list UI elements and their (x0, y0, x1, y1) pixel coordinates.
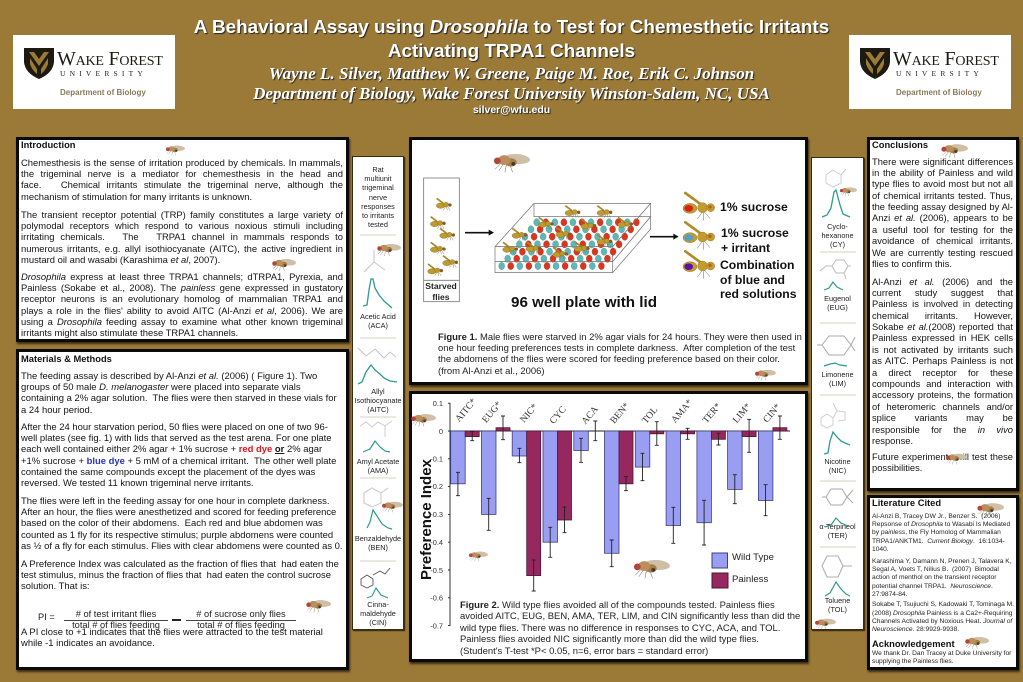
panel: left compound sidebar (352, 156, 404, 630)
bars: AITC (451, 431, 479, 496)
panel: conclusions (867, 137, 1019, 491)
y axis tick labels: -0.5 (430, 566, 443, 575)
molecule: TOL (822, 556, 852, 577)
text: acknowledgement: We thank Dr. Dan Tracey at Duke University for (872, 650, 1011, 657)
title: Wayne L. Silver, Matthew W. Greene, Paige M. Roe, Erik C. Johnson (269, 64, 754, 83)
text: methods paragraph 2: reversed. We tested 11 known trigeminal nerve irritants. (21, 478, 254, 489)
chart: preference index bars (430, 396, 790, 630)
text: conclusions paragraph 1: of chemical irritants tested. Thus, (872, 191, 1013, 201)
bars: CYC (543, 431, 572, 557)
text: acknowledgement (872, 650, 1012, 665)
compound labels (453, 396, 783, 427)
icon: fly figure 2 large (634, 559, 670, 578)
caption: figure 2: avoided AITC, EUG, BEN, AMA, TER, LIM, and CIN significantly less than did the (460, 611, 800, 622)
trace: BEN (367, 510, 392, 529)
text: acknowledgement: supplying the Painless flies. (872, 658, 954, 665)
figure 1 diagram (424, 178, 715, 302)
bars: EUG (482, 416, 510, 530)
panel: figure 2 (409, 391, 808, 662)
label: EUG (824, 294, 851, 312)
label: NIC: (NIC) (829, 466, 846, 475)
label: TOL: (TOL) (828, 605, 847, 614)
text: methods paragraph 1: a 24 hour period. (21, 405, 92, 416)
text: conclusions paragraph 1: the feeding assay designed by Al- (872, 202, 1013, 212)
text: introduction paragraph 1: mechanism of stimulation for many irritants is unknown. (21, 191, 252, 202)
text: introduction paragraph 3: Drosophila express at least three TRPA1 channels; dTRPA1, Pyrexia, and (21, 270, 343, 282)
compound labels: EUG* (480, 399, 504, 425)
label: TOL: Toluene (825, 596, 850, 605)
text: methods paragraph 2: each well contained either 2% agar + 1% sucrose + red dye or 2% agar (21, 444, 322, 455)
caption: figure 1: Figure 1. Male flies were starved in 2% agar vials for 24 hours. They were then used in (438, 332, 802, 342)
compound labels: CIN* (761, 402, 783, 425)
vial flies (428, 198, 458, 276)
text: conclusions paragraph 2: current study suggest that (872, 288, 1013, 298)
vial (424, 178, 459, 302)
label: AITC (354, 387, 402, 414)
compound labels: TOL (640, 405, 660, 426)
bars: CIN (758, 416, 787, 516)
text: introduction paragraph 3: Painless (Sokabe et al., 2008). The painless gene expressed in gustatory (21, 282, 343, 293)
label: CIN: (CIN) (369, 618, 387, 627)
y axis tick labels (430, 399, 443, 630)
text: conclusions paragraph 2: splice variants may be (872, 413, 1013, 423)
molecule: AITC (358, 348, 396, 358)
label: ACA (360, 312, 396, 330)
y axis tick labels: -0.6 (430, 594, 443, 602)
text: preference index note: while -1 indicates an avoidance. (21, 638, 155, 649)
bars: ACA (574, 421, 597, 462)
bars: NIC (512, 431, 541, 591)
caption: figure 1 (438, 332, 802, 377)
panel: materials and methods (16, 349, 349, 670)
compound labels: CYC (548, 404, 569, 426)
label: EUG: Eugenol (824, 294, 851, 303)
text: methods paragraph 3: as ½ of a fly for each stimulus. Flies with clear abdomens were counted as 0. (21, 541, 343, 552)
text: methods paragraph 3: After an hour, the flies were anesthetized and scored for feeding preference (21, 507, 336, 518)
compound labels: AITC* (453, 396, 479, 424)
text: introduction paragraph 2 (21, 208, 343, 265)
text: introduction paragraph 1: the trigeminal nerve is a mediator for chemesthesis in the head and (21, 168, 343, 179)
department line: Department of Biology (896, 88, 982, 96)
icon: fly figure 1 top (494, 153, 530, 172)
label: combination (720, 258, 797, 301)
references: potential channel TRPA1. Neuroscience. (872, 582, 993, 590)
icon: fly figure 2 mid (469, 551, 488, 561)
label: CY: Cyclo- (827, 222, 848, 231)
sidebar text: rat multiunit: to irritants (362, 211, 394, 220)
label: NIC (824, 457, 851, 475)
molecule: TER (822, 489, 853, 505)
text: conclusions paragraph 2: Painless is involved in detecting (872, 299, 1013, 309)
molecule: EUG (820, 260, 851, 279)
bars: TER (697, 431, 725, 545)
y axis tick labels: -0.1 (430, 454, 443, 464)
wordmark: Wake Forest (893, 48, 999, 70)
icon: shield (24, 48, 54, 79)
icon: fly sidebar left 1 (377, 243, 401, 256)
references: by painless, the Fly Homolog of Mammalian (872, 529, 1001, 536)
wordmark: Wake Forest (57, 48, 163, 70)
sidebar text: rat multiunit: responses (361, 202, 395, 211)
molecule: BEN (364, 488, 388, 507)
well plate (495, 203, 651, 273)
y axis tick labels: -0.7 (430, 622, 443, 630)
text: conclusions paragraph 1: flies to confirm this. (872, 259, 952, 269)
y axis tick labels: -0.4 (430, 538, 443, 547)
text: conclusions paragraph 2: Sokabe et al.(2008) reported that (872, 322, 1013, 332)
text: conclusions paragraph 1: a useful tool for testing for the (872, 225, 1013, 235)
text: methods paragraph 3 (21, 496, 343, 552)
molecule: CIN (361, 568, 390, 588)
references: 27:9874-84. (872, 591, 907, 598)
text: introduction paragraph 1 (21, 156, 343, 202)
caption: figure 2: Painless flies avoided NIC significantly more than did the wild type flies. (460, 634, 759, 645)
text: methods paragraph 3: based on the color of their abdomens. Each red and blue abdomen was (21, 518, 323, 529)
scored fly: blue abdomen (683, 222, 715, 250)
y axis tick labels: -0.3 (430, 510, 443, 519)
icon: fly conclusions top (941, 144, 968, 158)
arrow: plate to scored flies (650, 234, 679, 240)
references (872, 513, 1014, 633)
text: methods paragraph 1: containing a 2% agar solution. The flies were then starved in these vials for (21, 393, 337, 404)
text: methods paragraph 2: After the 24 hour starvation period, 50 flies were placed on one of two 96- (21, 422, 328, 432)
label: LIM: Limonene (821, 370, 854, 379)
text: conclusions paragraph 3: possibilities. (872, 463, 922, 473)
label: CIN (360, 600, 396, 627)
text: conclusions paragraph 2: accessory proteins, the formation (872, 390, 1013, 400)
caption: figure 1: the abdomens of the flies were scored for feeding preference based on their color. (438, 354, 780, 365)
references: TRPA1/ANKTM1. Current Biology. 16:1034- (872, 538, 1005, 545)
label: BEN (355, 534, 401, 552)
label: 1% sucrose + irritant (721, 226, 789, 255)
molecule: NIC (821, 403, 845, 428)
label: CY: hexanone (821, 231, 854, 240)
icon: fly sidebar left 2 (382, 501, 403, 512)
text: introduction paragraph 2: polymodal receptors which respond to various noxious stimuli including (21, 220, 343, 231)
text: introduction paragraph 3: using a Drosophila feeding assay to examine what other known trigeminal (21, 316, 343, 327)
text: conclusions paragraph 1: in the ability of Painless and wild (872, 168, 1013, 178)
label: BEN: (BEN) (368, 543, 388, 552)
icon: fly figure 2 left (411, 413, 436, 427)
trace: CIN (367, 588, 388, 598)
text: introduction paragraph 2: mustard oil and wasabi (Karashima et al, 2007). (21, 254, 220, 265)
title: A Behavioral Assay using Drosophila to Test for Chemesthetic Irritants (194, 17, 829, 38)
icon: fly sidebar right 2 (815, 618, 836, 629)
text: methods paragraph 2 (21, 422, 336, 489)
logo: Wake Forest right (849, 35, 1011, 109)
label: AITC: Isothiocyanate (354, 396, 402, 405)
text: conclusions paragraph 2: chemical irritants. However, (872, 311, 1013, 321)
text: conclusions paragraph 1: type flies to avoid most but not all (872, 179, 1013, 189)
references: Channels Activated by Noxious Heat. Journal of (872, 618, 1012, 625)
icon: fly literature (977, 503, 1004, 517)
icon: fly sidebar right 1 (840, 187, 857, 196)
text: conclusions paragraph 1: Anzi et al. (2006), appears to be (872, 213, 1013, 223)
icon: shield (860, 48, 890, 79)
text: introduction paragraph 3: receptor neurons is an evolutionary homolog of mammalian TRPA1 and (21, 293, 343, 304)
molecule: AMA (360, 421, 392, 437)
panel: literature cited (867, 495, 1019, 670)
panel: introduction (16, 137, 349, 342)
references: Neuroscience. 28:9929-9938. (872, 626, 959, 633)
icon: fly methods (306, 599, 331, 613)
sidebar text: rat multiunit: Rat (372, 165, 384, 174)
label: AMA: (AMA) (368, 466, 388, 475)
references: Sokabe T, Tsujiuchi S, Kadowaki T, Tominaga M. (872, 601, 1014, 608)
label: starved flies: Starved (425, 281, 457, 291)
text: methods paragraph 1: The feeding assay is described by Al-Anzi et al. (2006) ( Figure 1). Two (21, 370, 317, 382)
label: AMA: Amyl Acetate (357, 457, 399, 466)
formula: preference index: total # of flies feeding (72, 620, 160, 630)
text: conclusions paragraph 2: is not activated by irritants such (872, 345, 1013, 355)
label: LIM (821, 370, 854, 388)
label: CY (821, 222, 854, 249)
title: silver@wfu.edu (473, 104, 550, 116)
text: conclusions paragraph 1: We are currently testing rescued (872, 248, 1013, 258)
heading: acknowledgement: Acknowledgement (872, 639, 955, 649)
bars: AMA (666, 428, 695, 543)
bars: BEN (604, 431, 633, 567)
text: preference index definition (21, 558, 339, 592)
text: conclusions paragraph 3: Future experiments will test these (872, 452, 1013, 462)
trace: TER (825, 518, 848, 527)
text: methods paragraph 3: counted as 1 fly for its respective stimulus; purple abdomens were counted (21, 530, 333, 541)
label: TER: (TER) (828, 531, 847, 540)
department line: Department of Biology (60, 88, 146, 96)
text: preference index definition: A Preference Index was calculated as the fraction of flies that had eaten the (21, 558, 339, 570)
references: Karashima Y, Damann N, Prenen J, Talavera K, (872, 558, 1012, 565)
molecule: CY (826, 169, 846, 187)
text: introduction paragraph 1: Chemesthesis is the sense of irritation produced by chemicals. In mammals, (21, 156, 343, 168)
y axis (448, 403, 790, 626)
university line: UNIVERSITY (896, 68, 983, 78)
text: conclusions paragraph 1 (872, 156, 1013, 269)
heading: conclusions: Conclusions (872, 140, 928, 150)
legend swatches (712, 553, 728, 588)
label: EUG: (EUG) (827, 303, 848, 312)
text: introduction paragraph 2: irritating chemicals. The TRPA1 channel in mammals responds to (21, 231, 343, 242)
label: starved flies: flies (432, 292, 450, 302)
icon: fly conclusions bottom (946, 453, 967, 464)
title: Department of Biology, Wake Forest University Winston-Salem, NC, USA (253, 84, 770, 103)
text: preference index note (21, 626, 323, 649)
label: ACA: (ACA) (368, 321, 388, 330)
references: 1040. (872, 546, 889, 553)
references: Segal A, Voets T, Nilius B. (2007) Bimodal (872, 566, 999, 573)
label: 1% sucrose + irritant: + irritant (721, 241, 770, 255)
axis title: preference index: Preference Index (418, 459, 435, 580)
caption: figure 2: (Student's T-test *P< 0.05, n=6, error bars = standard error) (460, 646, 708, 657)
label: TER: α-Terpineol (819, 522, 856, 531)
molecule: ACA (364, 250, 385, 272)
scored fly: purple abdomen (683, 251, 715, 279)
title: Activating TRPA1 Channels (388, 41, 635, 62)
text: preference index definition: solution. That is: (21, 581, 90, 592)
compound labels: NIC* (518, 402, 540, 425)
title (194, 17, 830, 116)
formula: preference index (38, 609, 296, 630)
text: introduction paragraph 1: face. Chemical irritants stimulate the trigeminal nerve, although the (21, 179, 343, 190)
label: combination: of blue and (720, 273, 785, 287)
y axis tick labels: 0.1 (433, 399, 443, 408)
heading: introduction: Introduction (21, 140, 76, 150)
sidebar text: rat multiunit: nerve (369, 193, 387, 202)
text: conclusions paragraph 2: Painless expressed in HEK cells (872, 333, 1013, 343)
trace: NIC (824, 432, 850, 454)
heading: literature cited: Literature Cited (872, 498, 941, 508)
sidebar text: rat multiunit: multiunit (364, 174, 392, 183)
label: BEN: Benzaldehyde (355, 534, 401, 543)
formula: preference index: # of test irritant flies (76, 609, 156, 619)
trace: ACA (363, 279, 392, 308)
sidebar text: rat multiunit (361, 165, 395, 229)
compound labels: ACA (579, 404, 601, 427)
heading: materials and methods: Materials & Methods (21, 354, 112, 364)
scored fly: red abdomen (683, 193, 715, 220)
text: conclusions paragraph 2: compounds and interaction with (872, 379, 1013, 389)
y axis tick labels: 0 (439, 427, 443, 436)
icon: fly figure 1 bottom (755, 369, 776, 380)
panel: right compound sidebar (811, 157, 864, 630)
text: methods paragraph 2: +1% sucrose + blue dye + 5 mM of a chemical irritant. The other well plate (21, 456, 336, 467)
text: introduction paragraph 2: numerous irritants, e.g. allyl isothiocyanate (AITC), the active ingredient in (21, 243, 343, 254)
text: methods paragraph 3: The flies were left in the feeding assay for one hour in complete darkness. (21, 496, 329, 506)
text: conclusions paragraph 2 (872, 276, 1013, 446)
label: 1% sucrose + irritant: 1% sucrose (721, 226, 789, 240)
text: conclusions paragraph 2: response. (872, 436, 913, 446)
text: conclusions paragraph 2: Al-Anzi et al. (2006) and the (872, 276, 1013, 286)
compound labels: TER* (701, 401, 724, 426)
icon: fly acknowledgement (965, 636, 989, 649)
arrow: vial to plate (465, 230, 494, 236)
text: conclusions paragraph 1: avoidance of chemical irritants. (872, 236, 1013, 246)
trace: TOL (825, 582, 850, 596)
molecule: LIM (817, 336, 855, 355)
references: Al-Anzi B, Tracey DW Jr., Benzer S. (2006) (872, 513, 1000, 520)
caption: figure 2 (460, 600, 800, 657)
label: AITC: Allyl (371, 387, 385, 396)
compound labels: AMA* (669, 397, 695, 425)
text: conclusions paragraph 2: responsible for the in vivo (872, 425, 1013, 435)
text: conclusions paragraph 3 (872, 452, 1013, 473)
formula: preference index: PI = (38, 612, 55, 622)
text: introduction paragraph 2: The transient receptor potential (TRP) family constitutes a large variety of (21, 208, 343, 220)
compound labels: LIM* (731, 401, 754, 426)
logo: Wake Forest left (13, 35, 175, 109)
icon: fly intro 2 (272, 258, 296, 271)
sidebar dividers (360, 235, 856, 561)
text: conclusions paragraph 1: There were significant differences (872, 156, 1013, 166)
label: AITC: (AITC) (367, 405, 389, 414)
label: NIC: Nicotine (824, 457, 851, 466)
decorative photo flies (166, 144, 1004, 649)
compound labels: BEN* (608, 401, 632, 426)
text: preference index definition: test stimulus, minus the fraction of flies that had eaten the control sucrose (21, 570, 331, 581)
caption: figure 1: one hour feeding preferences tests in complete darkness. After completion of the test (438, 343, 795, 354)
trace: AITC (358, 365, 397, 384)
caption: figure 1: (from Al-Anzi et al., 2006) (438, 366, 544, 377)
label: 96 well plate: 96 well plate with lid (511, 294, 657, 311)
icon: fly intro 1 (166, 145, 185, 155)
formula: preference index: total # of flies feeding (197, 620, 285, 630)
label: ACA: Acetic Acid (360, 312, 396, 321)
label: CIN: Cinna- (367, 600, 389, 609)
references: action of menthol on the transient receptor (872, 574, 996, 581)
text: conclusions paragraph 2: of heteromeric channels and/or (872, 402, 1013, 412)
label: combination: red solutions (720, 287, 797, 301)
legend: wild type label: Wild Type (732, 552, 774, 563)
trace: EUG (824, 282, 843, 290)
label: combination: Combination (720, 258, 794, 272)
text: conclusions paragraph 2: a direct receptor for these (872, 368, 1013, 378)
university line: UNIVERSITY (60, 68, 147, 78)
label: CIN: maldehyde (360, 609, 396, 618)
text: methods paragraph 2: well plates (see fig. 1) with lids that served as the test arena. For one plate (21, 433, 332, 444)
label: 1% sucrose: 1% sucrose (720, 200, 788, 214)
sidebar text: rat multiunit: trigeminal (362, 183, 394, 192)
text: conclusions paragraph 2: as AITC. Perhaps Painless is not (872, 356, 1013, 366)
sidebar text: rat multiunit: tested (368, 220, 388, 229)
text: introduction paragraph 3 (21, 270, 343, 338)
panel: figure 1 (409, 137, 808, 385)
label: LIM: (LIM) (829, 379, 846, 388)
bars: TOL (635, 422, 664, 481)
text: preference index note: A PI close to +1 indicates that the flies were attracted to the test material (21, 626, 323, 638)
y axis tick labels: -0.2 (430, 482, 443, 491)
label: TOL (824, 596, 850, 614)
legend: painless label: Painless (732, 574, 768, 585)
label: AMA (356, 457, 399, 475)
text: methods paragraph 1: groups of 50 male D. melanogaster were placed into separate vials (21, 382, 301, 393)
text: methods paragraph 2: contained the same compounds except the placement of the dyes was (21, 467, 315, 478)
references: Repsonse of Drosophila to Wasabi Is Mediated (872, 521, 1010, 528)
trace: CY (822, 190, 850, 217)
formula: preference index: # of sucrose only flies (196, 609, 286, 619)
references: (2008) Drosophila Painless is a Ca2+-Requiring (872, 610, 1012, 617)
text: introduction paragraph 3: plays a role in the flies' ability to avoid AITC (Al-Anzi et al, 2006). We are (21, 305, 343, 316)
text: introduction paragraph 3: irritants might also stimulate these TRPA1 channels. (21, 327, 238, 338)
caption: figure 2: wild type flies. There was no difference in responses to CYC, ACA, and TOL. (460, 623, 780, 634)
label: CY: (CY) (830, 240, 845, 249)
label: starved flies (425, 281, 457, 302)
trace: AMA (363, 441, 390, 452)
caption: figure 2: Figure 2. Wild type flies avoided all of the compounds tested. Painless flies (460, 600, 775, 611)
trace: LIM (824, 363, 847, 366)
bars: LIM (728, 419, 756, 504)
text: methods paragraph 1 (21, 370, 337, 416)
label: TER (819, 522, 856, 540)
